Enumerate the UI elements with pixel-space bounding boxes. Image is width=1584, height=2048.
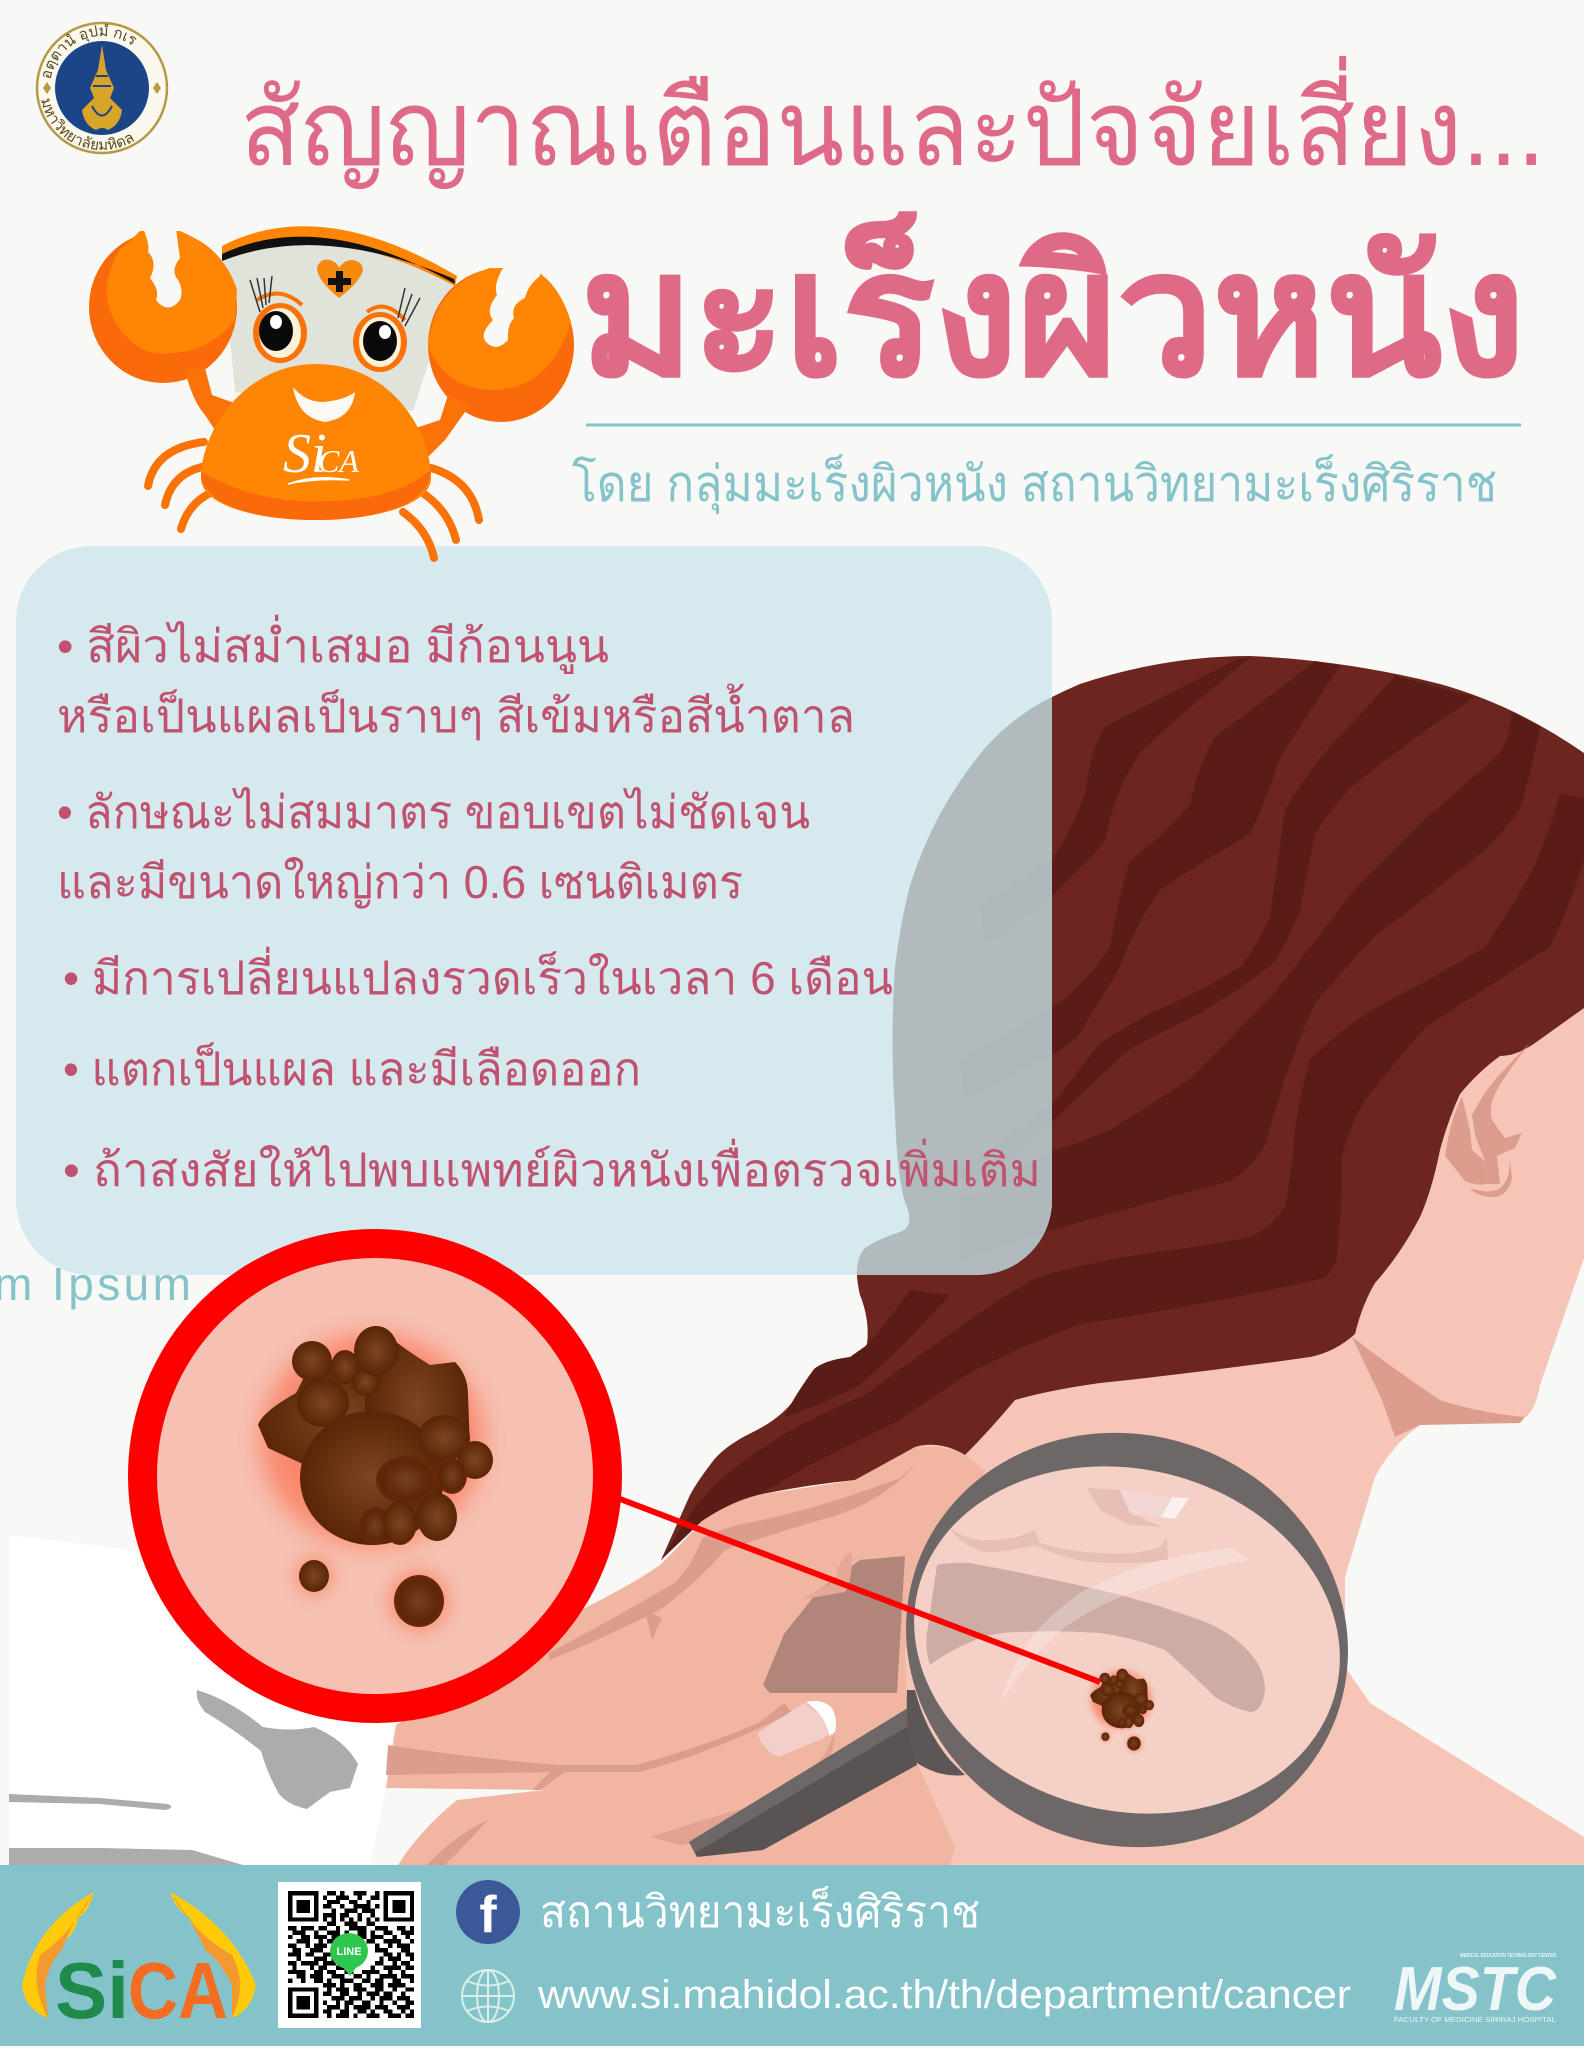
logo: Mahidol University seal — [36, 22, 168, 154]
crab Sica label: CA — [318, 443, 359, 479]
crab nurse cap — [222, 226, 457, 411]
icon: LINE bubble — [330, 1933, 368, 1976]
facebook page name: สถานวิทยามะเร็งศิริราช — [540, 1886, 980, 1937]
logo: MSTC: MEDICAL EDUCATION TECHNOLOGY CENTER — [1460, 1953, 1556, 1959]
icon: crab mascot — [89, 226, 574, 558]
warning signs list: • แตกเป็นแผล และมีเลือดออก — [63, 1042, 641, 1095]
crab legs — [148, 442, 479, 558]
warning signs list — [57, 614, 1041, 1196]
crab eyes — [250, 276, 420, 410]
crab arms — [185, 368, 470, 460]
crab Sica label: Si — [283, 423, 327, 485]
warning signs list: • มีการเปลี่ยนแปลงรวดเร็วในเวลา 6 เดือน — [63, 946, 893, 1004]
warning signs list: • สีผิวไม่สม่ำเสมอ มีก้อนนูน — [57, 614, 609, 674]
logo: SiCA flames — [22, 1892, 256, 2035]
website address: www.si.mahidol.ac.th/th/department/cancer — [537, 1973, 1351, 2017]
callout: enlarged skin lesion — [142, 1244, 608, 1708]
subtitle rule — [586, 424, 1521, 426]
illustration: face and neck — [900, 1000, 1584, 1865]
logo: MSTC: MSTC — [1394, 1955, 1557, 2024]
subtitle: โดย กลุ่มมะเร็งผิวหนัง สถานวิทยามะเร็งศิริราช — [572, 454, 1497, 514]
title line 2: มะเร็งผิวหนัง — [581, 211, 1525, 411]
footer band — [0, 1865, 1584, 2046]
illustration: ear — [1445, 1043, 1530, 1197]
icon: Facebook: f — [479, 1886, 497, 1944]
hand: finger under nail — [651, 1733, 835, 1845]
illustration: cloth on the shoulder — [9, 1535, 396, 1865]
magnified view through lens — [926, 1488, 1265, 1752]
illustration: hair — [661, 656, 1584, 1560]
icon: globe — [462, 1970, 514, 2022]
illustration: chin shadow — [1352, 1337, 1525, 1437]
panel: warning signs — [16, 546, 1052, 1275]
logo: MSTC: FACULTY OF MEDICINE SIRIRAJ HOSPITAL — [1394, 2017, 1556, 2024]
logo: SiCA flames: Si — [55, 1946, 129, 2035]
magnifier handle — [689, 1708, 917, 1857]
warning signs list: หรือเป็นแผลเป็นราบๆ สีเข้มหรือสีน้ำตาล — [57, 683, 855, 742]
warning signs list: • ลักษณะไม่สมมาตร ขอบเขตไม่ชัดเจน — [57, 786, 810, 838]
icon: LINE bubble: LINE — [336, 1946, 362, 1958]
warning signs list: และมีขนาดใหญ่กว่า 0.6 เซนติเมตร — [57, 856, 743, 908]
logo: SiCA flames: CA — [128, 1946, 228, 2035]
arrow: line linking lens to callout — [620, 1499, 1100, 1682]
hair seen through panel — [857, 697, 1052, 1275]
logo: Mahidol University seal: มหาวิทยาลัยมหิดล — [41, 98, 134, 150]
crab body — [201, 364, 431, 520]
crab smile — [293, 387, 355, 422]
hand: fingernail — [758, 1701, 836, 1757]
hand: dark shadow between fingers — [763, 1556, 905, 1693]
crab right claw — [428, 265, 574, 422]
illustration: hand holding magnifier — [386, 1447, 985, 1865]
QR code — [278, 1882, 421, 2028]
icon: magnifying glass — [689, 1371, 1407, 1909]
warning signs list: • ถ้าสงสัยให้ไปพบแพทย์ผิวหนังเพื่อตรวจเพิ่มเติม — [63, 1138, 1041, 1196]
icon: Facebook — [456, 1880, 520, 1944]
logo: Mahidol University seal: อตฺตานํ อุปมํ กเร — [43, 24, 136, 78]
crab Sica label — [283, 423, 359, 485]
crab left claw — [89, 228, 237, 383]
